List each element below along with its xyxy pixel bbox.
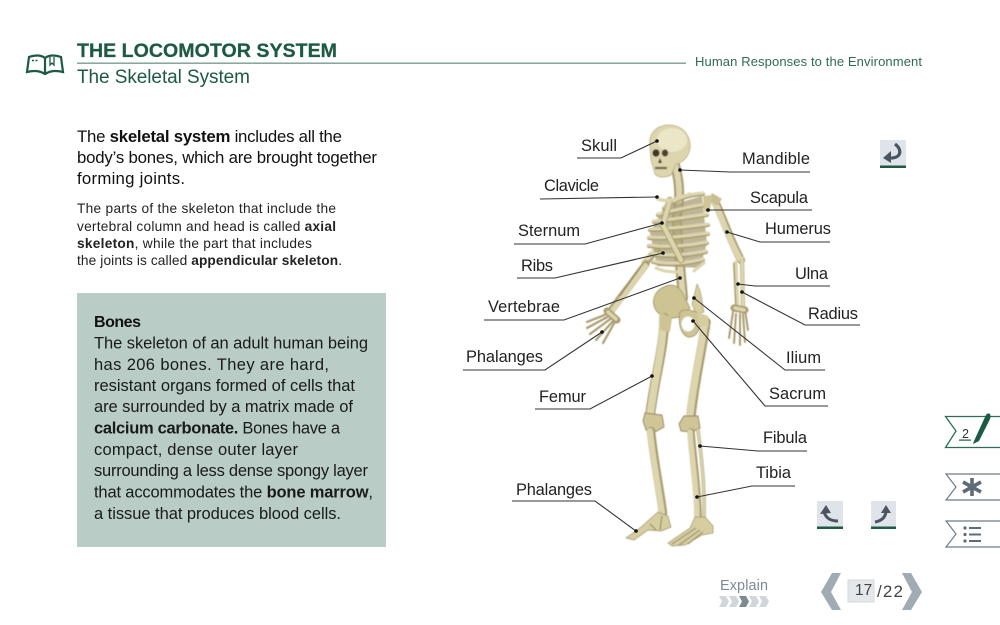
secondary paragraph: The parts of the skeleton that include the	[77, 201, 336, 216]
left arm	[587, 246, 659, 343]
intro paragraph: body’s bones, which are brought together	[77, 148, 377, 167]
bone labels: Humerus	[765, 220, 831, 238]
leader lines	[463, 141, 860, 531]
panel text: that accommodates the bone marrow,	[94, 484, 373, 502]
panel text	[94, 334, 373, 523]
intro paragraph	[77, 127, 377, 188]
leader dots	[600, 139, 744, 533]
panel text: has 206 bones. They are hard,	[94, 356, 329, 374]
panel text: The skeleton of an adult human being	[94, 334, 368, 352]
tab: notes: 2	[962, 427, 969, 441]
right leg	[668, 312, 713, 546]
tab: list	[946, 521, 1000, 547]
bone labels: Phalanges	[516, 481, 592, 499]
bone labels: Fibula	[763, 429, 808, 447]
bone labels: Sternum	[518, 222, 580, 240]
progress: explain: Explain	[720, 578, 768, 594]
button: next	[871, 501, 896, 529]
bone labels: Sacrum	[769, 385, 826, 403]
bone labels: Ulna	[795, 265, 829, 283]
panel text: resistant organs formed of cells that	[94, 377, 355, 395]
intro paragraph: forming joints.	[77, 169, 185, 188]
panel text: compact, dense outer layer	[94, 441, 298, 459]
bone labels: Phalanges	[466, 348, 543, 366]
panel text: calcium carbonate. Bones have a	[94, 420, 341, 438]
spine	[675, 165, 683, 298]
section name: Human Responses to the Environment	[695, 54, 922, 69]
bone labels: Tibia	[756, 464, 792, 482]
pager: /22	[877, 582, 903, 601]
header rule	[77, 62, 686, 64]
secondary paragraph: skeleton, while the part that includes	[77, 236, 312, 251]
ribcage	[650, 196, 707, 268]
secondary paragraph: vertebral column and head is called axial	[77, 219, 336, 234]
right arm	[709, 193, 748, 345]
panel heading: Bones	[94, 314, 141, 331]
bone labels: Vertebrae	[488, 298, 560, 316]
tab: favourites	[946, 474, 1000, 500]
bone labels: Ribs	[521, 257, 553, 275]
secondary paragraph: the joints is called appendicular skeleton.	[77, 253, 342, 268]
panel text: a tissue that produces blood cells.	[94, 505, 341, 523]
sternum	[663, 200, 681, 260]
progress: explain	[719, 578, 769, 607]
subtitle: The Skeletal System	[77, 67, 250, 88]
clavicle	[658, 194, 690, 200]
bone labels: Mandible	[742, 150, 810, 168]
pelvis	[653, 285, 690, 318]
skeleton illustration	[587, 125, 748, 546]
button: return	[880, 140, 906, 168]
left leg	[626, 312, 672, 540]
title: THE LOCOMOTOR SYSTEM	[77, 40, 337, 62]
bone labels: Skull	[581, 137, 617, 155]
button: previous	[817, 501, 843, 529]
skull	[650, 125, 690, 177]
bone labels: Femur	[539, 388, 587, 406]
secondary paragraph	[77, 201, 342, 268]
bone labels: Clavicle	[544, 177, 599, 195]
pager	[821, 573, 922, 610]
bone labels: Ilium	[786, 349, 821, 367]
bone labels: Scapula	[750, 189, 809, 207]
scapula	[703, 195, 712, 212]
panel text: surrounding a less dense spongy layer	[94, 462, 368, 480]
tab: notes	[946, 413, 1000, 448]
panel text: are surrounded by a matrix made of	[94, 398, 353, 416]
bone labels: Radius	[808, 305, 858, 323]
icon: open book	[27, 56, 63, 74]
pager: 17	[855, 582, 872, 599]
intro paragraph: The skeletal system includes all the	[77, 127, 342, 146]
bone labels	[466, 137, 858, 499]
panel: bones	[77, 293, 386, 547]
